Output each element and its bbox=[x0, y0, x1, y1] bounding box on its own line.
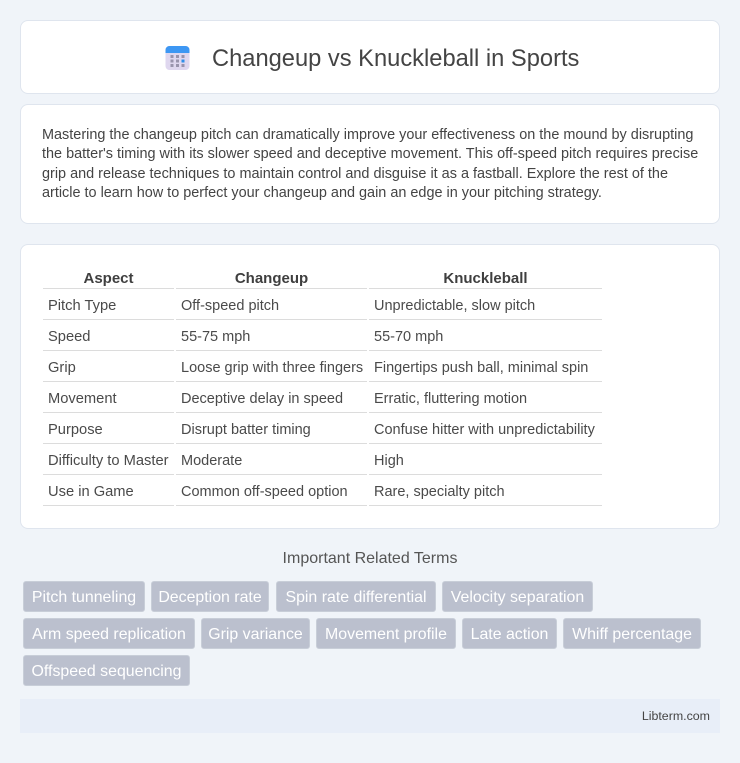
intro paragraph bbox=[42, 126, 698, 201]
tag: Deception rate bbox=[158, 589, 262, 606]
tag: Late action bbox=[471, 626, 548, 643]
related terms tags bbox=[23, 581, 701, 686]
intro paragraph: the batter's timing with its slower speed and deceptive movement. This off-speed pitch requires precise bbox=[42, 146, 698, 162]
icon: calendar bbox=[166, 46, 190, 70]
related terms heading: Important Related Terms bbox=[283, 550, 457, 567]
row: difficulty bbox=[43, 453, 602, 475]
row: speed bbox=[43, 329, 602, 351]
row: difficulty: Moderate bbox=[181, 453, 242, 469]
table header: Aspect bbox=[83, 270, 134, 287]
tag bbox=[276, 581, 436, 612]
tag bbox=[442, 581, 593, 612]
footer bar bbox=[20, 699, 720, 733]
title: Changeup vs Knuckleball in Sports bbox=[212, 46, 579, 72]
row: pitch type bbox=[43, 298, 602, 320]
tag: Grip variance bbox=[208, 626, 303, 643]
row: pitch type: Pitch Type bbox=[48, 298, 116, 314]
row: use in game: Rare, specialty pitch bbox=[374, 484, 505, 500]
row: grip bbox=[43, 360, 602, 382]
tag: Movement profile bbox=[325, 626, 447, 643]
row: speed: Speed bbox=[48, 329, 90, 345]
row: pitch type: Off-speed pitch bbox=[181, 298, 279, 314]
row: speed: 55-75 mph bbox=[181, 329, 250, 345]
tag bbox=[316, 618, 456, 649]
row: purpose: Disrupt batter timing bbox=[181, 422, 311, 438]
intro text panel bbox=[20, 104, 720, 224]
row: movement: Movement bbox=[48, 391, 117, 407]
tag: Pitch tunneling bbox=[32, 589, 136, 606]
intro paragraph: grip and release techniques to maintain control and disguise it as a fastball. Explore the rest of the bbox=[42, 166, 668, 182]
table header bbox=[43, 270, 602, 289]
row: use in game: Use in Game bbox=[48, 484, 134, 500]
tag bbox=[201, 618, 310, 649]
intro paragraph: article to learn how to perfect your changeup and gain an edge in your pitching strategy. bbox=[42, 185, 602, 201]
tag: Whiff percentage bbox=[572, 626, 692, 643]
row: use in game bbox=[43, 484, 602, 506]
comparison table bbox=[43, 270, 602, 506]
tag: Spin rate differential bbox=[285, 589, 427, 606]
tag bbox=[462, 618, 557, 649]
row: purpose bbox=[43, 422, 602, 444]
tag: Arm speed replication bbox=[32, 626, 186, 643]
table header: Changeup bbox=[235, 270, 308, 287]
tag bbox=[23, 618, 195, 649]
row: grip: Grip bbox=[48, 360, 76, 376]
row: speed: 55-70 mph bbox=[374, 329, 443, 345]
row: purpose: Purpose bbox=[48, 422, 103, 438]
row: difficulty: Difficulty to Master bbox=[48, 453, 169, 469]
row: movement: Deceptive delay in speed bbox=[181, 391, 343, 407]
tag bbox=[23, 581, 145, 612]
header panel bbox=[20, 20, 720, 94]
footer link: Libterm.com bbox=[642, 709, 710, 723]
tag bbox=[151, 581, 269, 612]
tag: Velocity separation bbox=[451, 589, 584, 606]
row: movement: Erratic, fluttering motion bbox=[374, 391, 527, 407]
table header: Knuckleball bbox=[443, 270, 528, 287]
row: movement bbox=[43, 391, 602, 413]
row: grip: Fingertips push ball, minimal spin bbox=[374, 360, 588, 376]
row: use in game: Common off-speed option bbox=[181, 484, 348, 500]
tag bbox=[563, 618, 701, 649]
row: grip: Loose grip with three fingers bbox=[181, 360, 363, 376]
intro paragraph: Mastering the changeup pitch can dramatically improve your effectiveness on the mound by disrupting bbox=[42, 126, 693, 142]
row: difficulty: High bbox=[374, 453, 404, 469]
tag bbox=[23, 655, 190, 686]
row: pitch type: Unpredictable, slow pitch bbox=[374, 298, 535, 314]
comparison table panel bbox=[20, 244, 720, 529]
row: purpose: Confuse hitter with unpredictability bbox=[374, 422, 595, 438]
tag: Offspeed sequencing bbox=[32, 663, 181, 680]
